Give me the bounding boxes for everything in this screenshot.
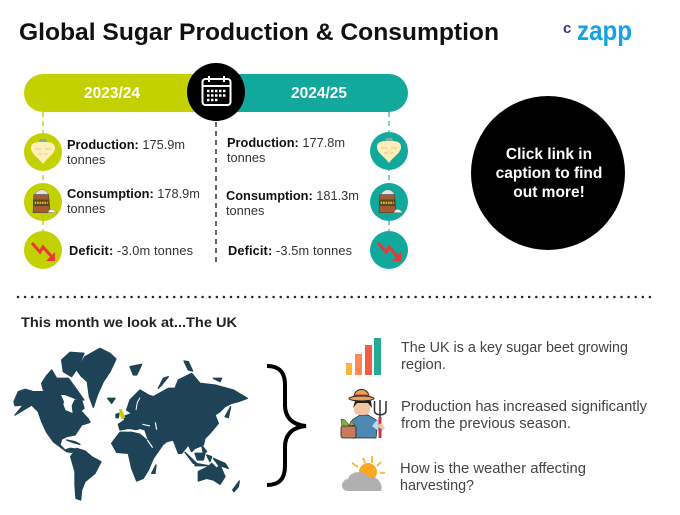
- text: weather: harvesting?: [400, 478, 474, 494]
- callout: click link: out more!: [513, 184, 585, 201]
- icon: consumption 2023/24: [24, 183, 62, 221]
- text: deficit 2024/25: Deficit: -3.5m tonnes: [228, 243, 352, 258]
- icon: deficit 2023/24: [24, 231, 62, 269]
- world map: [14, 348, 247, 500]
- logo: czapp: c: [563, 20, 571, 37]
- icon: sun behind cloud: [342, 456, 385, 491]
- icon: bar chart: [346, 338, 381, 375]
- text: production increased: [401, 399, 648, 432]
- text: production 2024/25: tonnes: [227, 150, 265, 165]
- text: production 2024/25: 177.8m: [302, 135, 345, 150]
- text: deficit 2023/24: Deficit: -3.0m tonnes: [69, 243, 193, 258]
- text: key growing region: The UK is a key sugar beet growing: [401, 340, 628, 356]
- text: production 2023/24: Production:: [67, 137, 139, 152]
- header bar: 2023/24: [24, 74, 216, 112]
- callout: click link: [471, 96, 625, 250]
- text: weather: How is the weather affecting: [400, 461, 586, 477]
- header bar: 2024/25: [216, 74, 408, 112]
- icon: calendar: [187, 63, 245, 121]
- heading: this month: This month we look at...The UK: [21, 315, 237, 330]
- title: Global Sugar Production & Consumption: [19, 19, 499, 46]
- text: key growing region: [401, 340, 628, 373]
- text: weather: [400, 461, 586, 494]
- icon: production 2023/24: [24, 133, 62, 171]
- text: key growing region: region.: [401, 357, 446, 373]
- text: production 2024/25: Production:: [227, 135, 299, 150]
- text: consumption 2023/24: 178.9m: [157, 186, 200, 201]
- text: production increased: Production has increased significantly: [401, 399, 648, 415]
- header bar: 2024/25: 2024/25: [291, 85, 347, 102]
- text: consumption 2023/24: tonnes: [67, 201, 105, 216]
- header bar: 2023/24: 2023/24: [84, 85, 140, 102]
- icon: production 2024/25: [370, 132, 408, 170]
- text: consumption 2024/25: tonnes: [226, 203, 264, 218]
- logo: czapp: zapp: [577, 15, 632, 46]
- text: consumption 2024/25: 181.3m: [316, 188, 359, 203]
- icon: farmer with fork: [341, 390, 386, 438]
- text: production 2023/24: tonnes: [67, 152, 105, 167]
- callout: click link: caption to find: [496, 165, 602, 182]
- text: production increased: from the previous season.: [401, 416, 571, 432]
- text: consumption 2024/25: Consumption:: [226, 188, 313, 203]
- brace: [267, 366, 306, 485]
- icon: consumption 2024/25: [370, 183, 408, 221]
- callout: click link: Click link in: [506, 146, 592, 163]
- timeline: connector lines: [43, 112, 389, 265]
- icon: deficit 2024/25: [370, 231, 408, 269]
- text: consumption 2023/24: Consumption:: [67, 186, 154, 201]
- text: production 2023/24: 175.9m: [142, 137, 185, 152]
